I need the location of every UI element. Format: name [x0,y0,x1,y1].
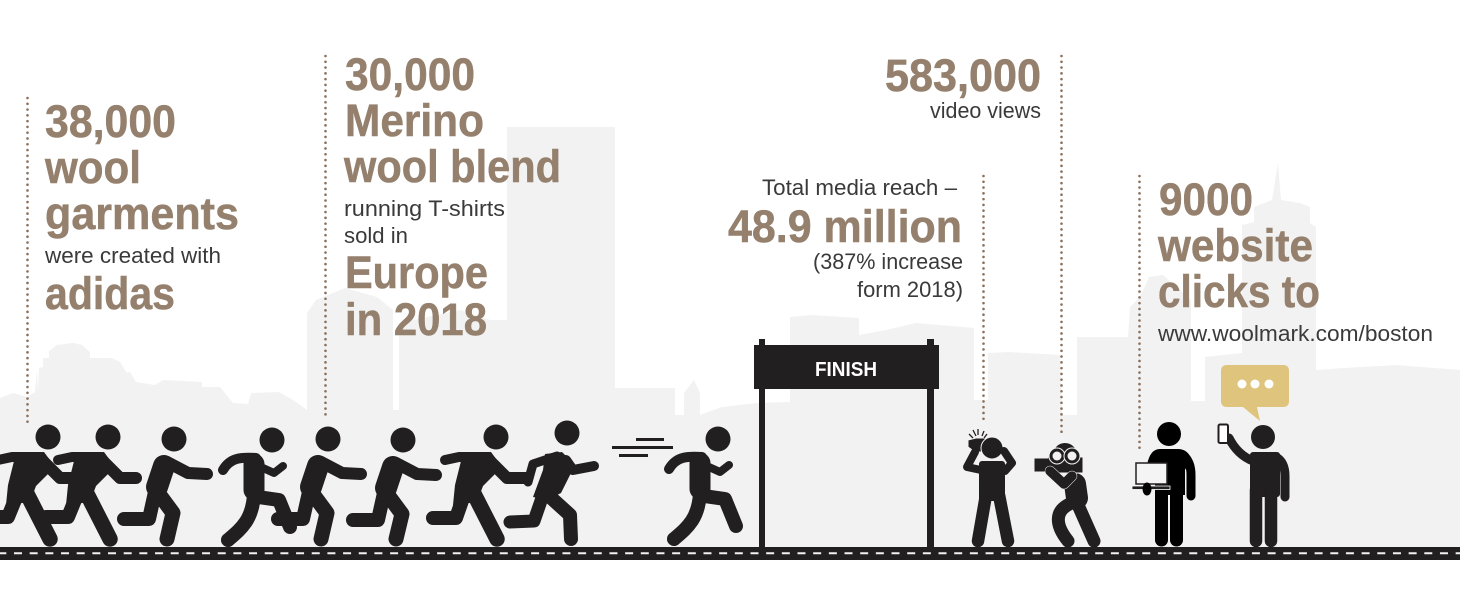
text block: 30,000 Merino wool blend T-shirts: 30,000 [345,49,475,100]
text block: total media reach: 48.9 million [728,201,962,252]
text block: total media reach: form 2018) [857,277,963,302]
city skyline background [0,127,1460,547]
text block: 9000 website clicks: 9000 [1159,174,1253,225]
speech bubble [1221,365,1289,421]
runner 7 [433,424,525,539]
road [0,547,1460,560]
runner 1 [0,424,72,539]
text block: 38,000 wool garments [44,96,239,319]
dotted leader: video views [1060,56,1063,432]
text block: 9000 website clicks [1157,174,1433,346]
dotted leader: garments [26,98,29,424]
text block: 30,000 Merino wool blend T-shirts: sold in [344,223,408,248]
text block: 583,000 video views [885,50,1041,123]
text block: 30,000 Merino wool blend T-shirts [343,49,561,345]
runner 8 [510,420,594,539]
finish sign: FINISH [815,359,877,381]
text block: 30,000 Merino wool blend T-shirts: Merino [345,95,484,146]
runner 2 [46,424,136,539]
runner 3 [124,426,207,539]
text block: 38,000 wool garments: garments [45,188,239,239]
text block: 583,000 video views: 583,000 [885,50,1041,101]
text block: 30,000 Merino wool blend T-shirts: running T-shirts [344,196,505,221]
text block: 30,000 Merino wool blend T-shirts: in 2018 [345,294,487,345]
text block: total media reach: Total media reach – [762,175,958,200]
text block: 9000 website clicks: website [1157,220,1313,271]
runner 4 [223,428,290,540]
runner 6 [353,428,436,539]
person with phone [1218,424,1285,541]
cameraman with video camera [1034,443,1094,541]
runner 5 [278,426,361,539]
text block: 38,000 wool garments: wool [44,142,141,193]
lead runner [669,426,736,539]
speed lines [612,438,673,457]
dotted leader: website clicks [1138,176,1141,450]
text block: 38,000 wool garments: 38,000 [45,96,176,147]
text block: 30,000 Merino wool blend T-shirts: Europe [345,247,488,298]
text block: 9000 website clicks: clicks to [1158,266,1320,317]
text block: 38,000 wool garments: were created with [44,243,221,268]
text block: 9000 website clicks: www.woolmark.com/boston [1157,321,1433,346]
dotted leader: T-shirts [324,56,327,415]
photographer [967,429,1012,541]
dotted leader: media reach [982,176,985,420]
text block: total media reach: (387% increase [813,249,963,274]
text block: 38,000 wool garments: adidas [45,268,175,319]
text block: 30,000 Merino wool blend T-shirts: wool blend [343,141,561,192]
text block: total media reach [728,175,963,302]
person with laptop [1132,422,1191,540]
text block: 583,000 video views: video views [930,98,1041,123]
finish sign [754,339,939,547]
